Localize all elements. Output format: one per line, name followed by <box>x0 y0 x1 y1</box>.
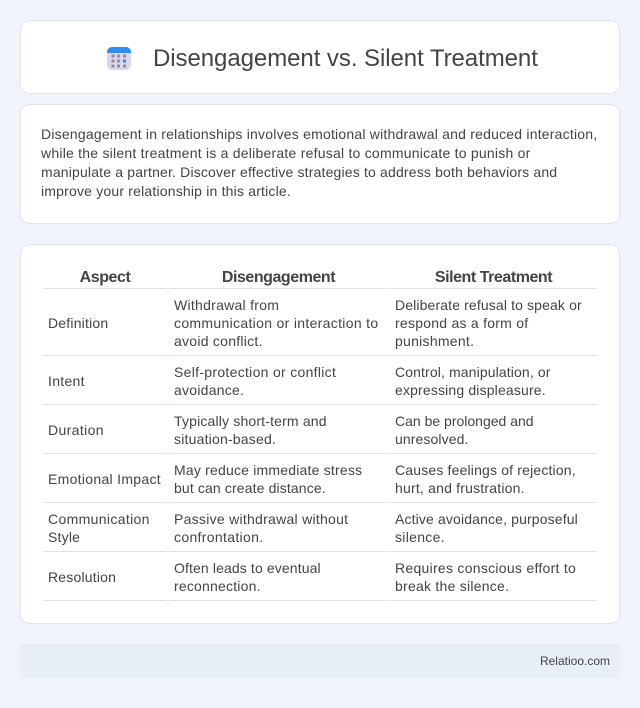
table header: Silent Treatment <box>435 269 552 286</box>
row: Intent: Control, manipulation, or <box>395 364 551 380</box>
row: Emotional Impact: Causes feelings of rejection, <box>395 462 576 478</box>
row: Definition: Withdrawal from <box>174 297 279 313</box>
row: Definition: respond as a form of <box>395 315 528 331</box>
table header: Disengagement <box>222 269 335 286</box>
row: Intent: Intent <box>48 373 85 389</box>
row: Emotional Impact <box>43 462 597 503</box>
row: Emotional Impact: Emotional Impact <box>48 471 161 487</box>
footer bar <box>20 644 620 678</box>
text block: introduction: Disengagement in relationships involves emotional withdrawal and reduced interaction, <box>41 126 597 142</box>
row: Definition: Deliberate refusal to speak or <box>395 297 582 313</box>
panel: title card <box>20 20 620 94</box>
row: Intent: Self-protection or conflict <box>174 364 336 380</box>
row: Emotional Impact: hurt, and frustration. <box>395 480 525 496</box>
row: Definition: Definition <box>48 315 108 331</box>
text block: introduction <box>41 126 597 199</box>
panel: introduction <box>20 104 620 224</box>
row: Duration: Duration <box>48 422 104 438</box>
row: Communication Style: Active avoidance, purposeful <box>395 511 578 527</box>
row: Definition: communication or interaction to <box>174 315 378 331</box>
row: Intent <box>43 364 597 405</box>
row: Emotional Impact: May reduce immediate stress <box>174 462 362 478</box>
row: Intent: expressing displeasure. <box>395 382 546 398</box>
row: Emotional Impact: but can create distance. <box>174 480 326 496</box>
table header: Aspect <box>80 269 130 286</box>
row: Duration <box>43 413 597 454</box>
row: Communication Style: Passive withdrawal without <box>174 511 348 527</box>
row: Intent: avoidance. <box>174 382 244 398</box>
row: Resolution: Requires conscious effort to <box>395 560 576 576</box>
row: Definition: avoid conflict. <box>174 333 263 349</box>
text block: introduction: manipulate a partner. Discover effective strategies to address both behaviors and <box>41 164 557 180</box>
row: Communication Style: Communication <box>48 511 150 527</box>
table header <box>43 269 597 289</box>
row: Communication Style: confrontation. <box>174 529 263 545</box>
row: Resolution: Resolution <box>48 569 116 585</box>
row: Duration: Typically short-term and <box>174 413 327 429</box>
icon: calendar <box>107 47 131 70</box>
panel: comparison table <box>20 244 620 624</box>
row: Resolution <box>43 560 597 601</box>
row: Resolution: Often leads to eventual <box>174 560 321 576</box>
row: Duration: Can be prolonged and <box>395 413 534 429</box>
row: Resolution: break the silence. <box>395 578 509 594</box>
row: Definition: punishment. <box>395 333 474 349</box>
row: Duration: situation-based. <box>174 431 276 447</box>
row: Definition <box>43 297 597 356</box>
text block: introduction: improve your relationship in this article. <box>41 183 291 199</box>
footer text: Relatioo.com <box>540 654 610 668</box>
row: Duration: unresolved. <box>395 431 468 447</box>
title: Disengagement vs. Silent Treatment <box>153 45 538 72</box>
row: Communication Style <box>43 511 597 552</box>
row: Resolution: reconnection. <box>174 578 261 594</box>
row: Communication Style: Style <box>48 529 80 545</box>
text block: introduction: while the silent treatment is a deliberate refusal to communicate to punish or <box>41 145 531 161</box>
row: Communication Style: silence. <box>395 529 445 545</box>
